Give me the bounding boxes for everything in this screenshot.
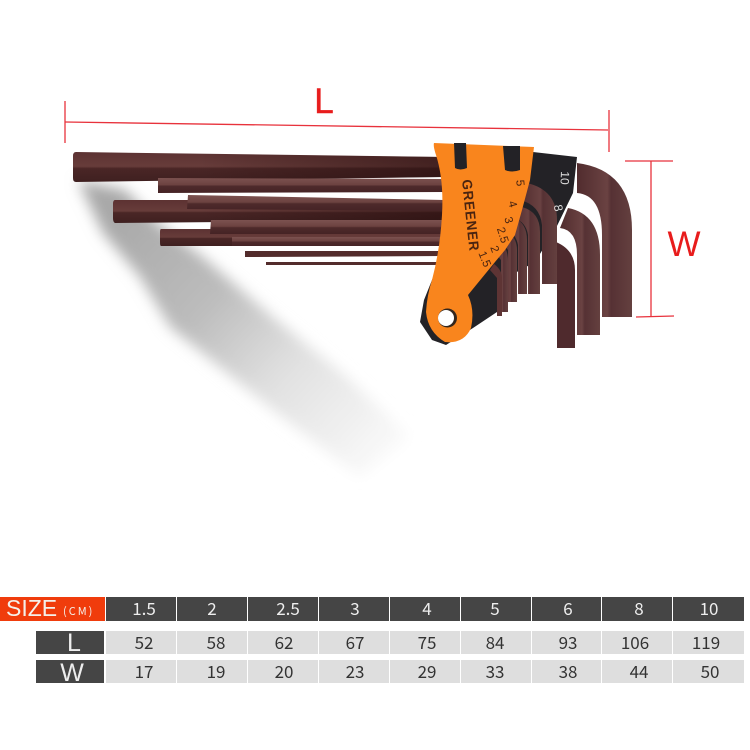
- size numbers on handle: [475, 179, 526, 269]
- size numbers on handle: 2.5: [494, 226, 510, 245]
- dimension L: red measure line: [65, 101, 609, 152]
- row W: W: [60, 659, 84, 687]
- row W: 38: [559, 658, 577, 683]
- dimension L label: L: [314, 82, 334, 121]
- key arm 5: [187, 195, 445, 211]
- row L: 75: [418, 629, 436, 654]
- row L: 52: [135, 629, 153, 654]
- row W: 29: [418, 658, 436, 683]
- size numbers on handle: 1.5: [475, 250, 493, 269]
- shadow of the key set: [78, 180, 410, 477]
- dimension W label: W: [667, 225, 701, 264]
- header row: sizes: 10: [700, 595, 718, 620]
- hook 5: [520, 183, 557, 284]
- header row: sizes: 6: [563, 595, 573, 620]
- row L: 84: [486, 629, 504, 654]
- brand name GREENER: GREENER: [459, 179, 482, 252]
- key arm 2.5: [232, 237, 445, 246]
- row L: 67: [346, 629, 364, 654]
- handle top clips: [454, 143, 467, 170]
- row L: 119: [692, 629, 720, 654]
- row W: 20: [275, 658, 293, 683]
- row W: 17: [135, 658, 153, 683]
- row W: 50: [701, 658, 719, 683]
- size table: [0, 595, 744, 687]
- hook 1.5: [490, 264, 502, 316]
- small key hooks: [490, 183, 557, 316]
- row W: 19: [207, 658, 225, 683]
- header row: sizes: 3: [350, 595, 360, 620]
- size numbers on handle: 4: [505, 200, 519, 209]
- row W: 23: [346, 658, 364, 683]
- key arm 8: [158, 178, 445, 193]
- row L: [36, 629, 744, 657]
- header row: sizes: 2.5: [276, 595, 300, 620]
- hook 4: [514, 207, 540, 294]
- hook 3: [508, 218, 527, 294]
- header row: sizes: 2: [207, 595, 217, 620]
- key arm 4: [160, 229, 445, 246]
- key arm 2: [245, 251, 445, 257]
- size 10 on black handle: 10: [558, 171, 572, 185]
- hook 2: [496, 245, 508, 312]
- row L: 106: [621, 629, 649, 654]
- key arm 1.5: [266, 262, 445, 265]
- header row: sizes: 5: [490, 595, 500, 620]
- row L: 58: [207, 629, 225, 654]
- size 8 on black handle: 8: [551, 204, 566, 213]
- key arm 3: [210, 220, 445, 234]
- header label SIZE (CM): [0, 595, 105, 621]
- row L: L: [67, 629, 81, 657]
- header row: sizes: 4: [422, 595, 432, 620]
- hex key long arms: [73, 152, 445, 265]
- row W: 33: [486, 658, 504, 683]
- header label SIZE (CM): (CM): [63, 603, 94, 619]
- key arm 10: [73, 152, 445, 182]
- hex key 8 hook: [560, 208, 600, 335]
- size numbers on handle: 3: [501, 216, 515, 225]
- hook 2.5: [502, 233, 517, 302]
- header row: sizes: [106, 595, 744, 621]
- dimension W: red measure line: [625, 161, 674, 317]
- row L: 62: [275, 629, 293, 654]
- header label SIZE (CM): SIZE: [6, 595, 57, 621]
- orange handle: [426, 143, 534, 342]
- hex key 6 hook: [556, 242, 575, 348]
- row W: [36, 658, 744, 687]
- row W: 44: [630, 658, 648, 683]
- handle hole: [438, 308, 457, 328]
- header row: sizes: 1.5: [132, 595, 156, 620]
- size numbers on handle: 2: [487, 244, 501, 254]
- size numbers on handle: 5: [513, 179, 526, 187]
- hex key 10 hook: [577, 163, 632, 317]
- row L: 93: [559, 629, 577, 654]
- key arm 6: [113, 200, 445, 223]
- black handle back: [420, 152, 577, 345]
- header row: sizes: 8: [634, 595, 644, 620]
